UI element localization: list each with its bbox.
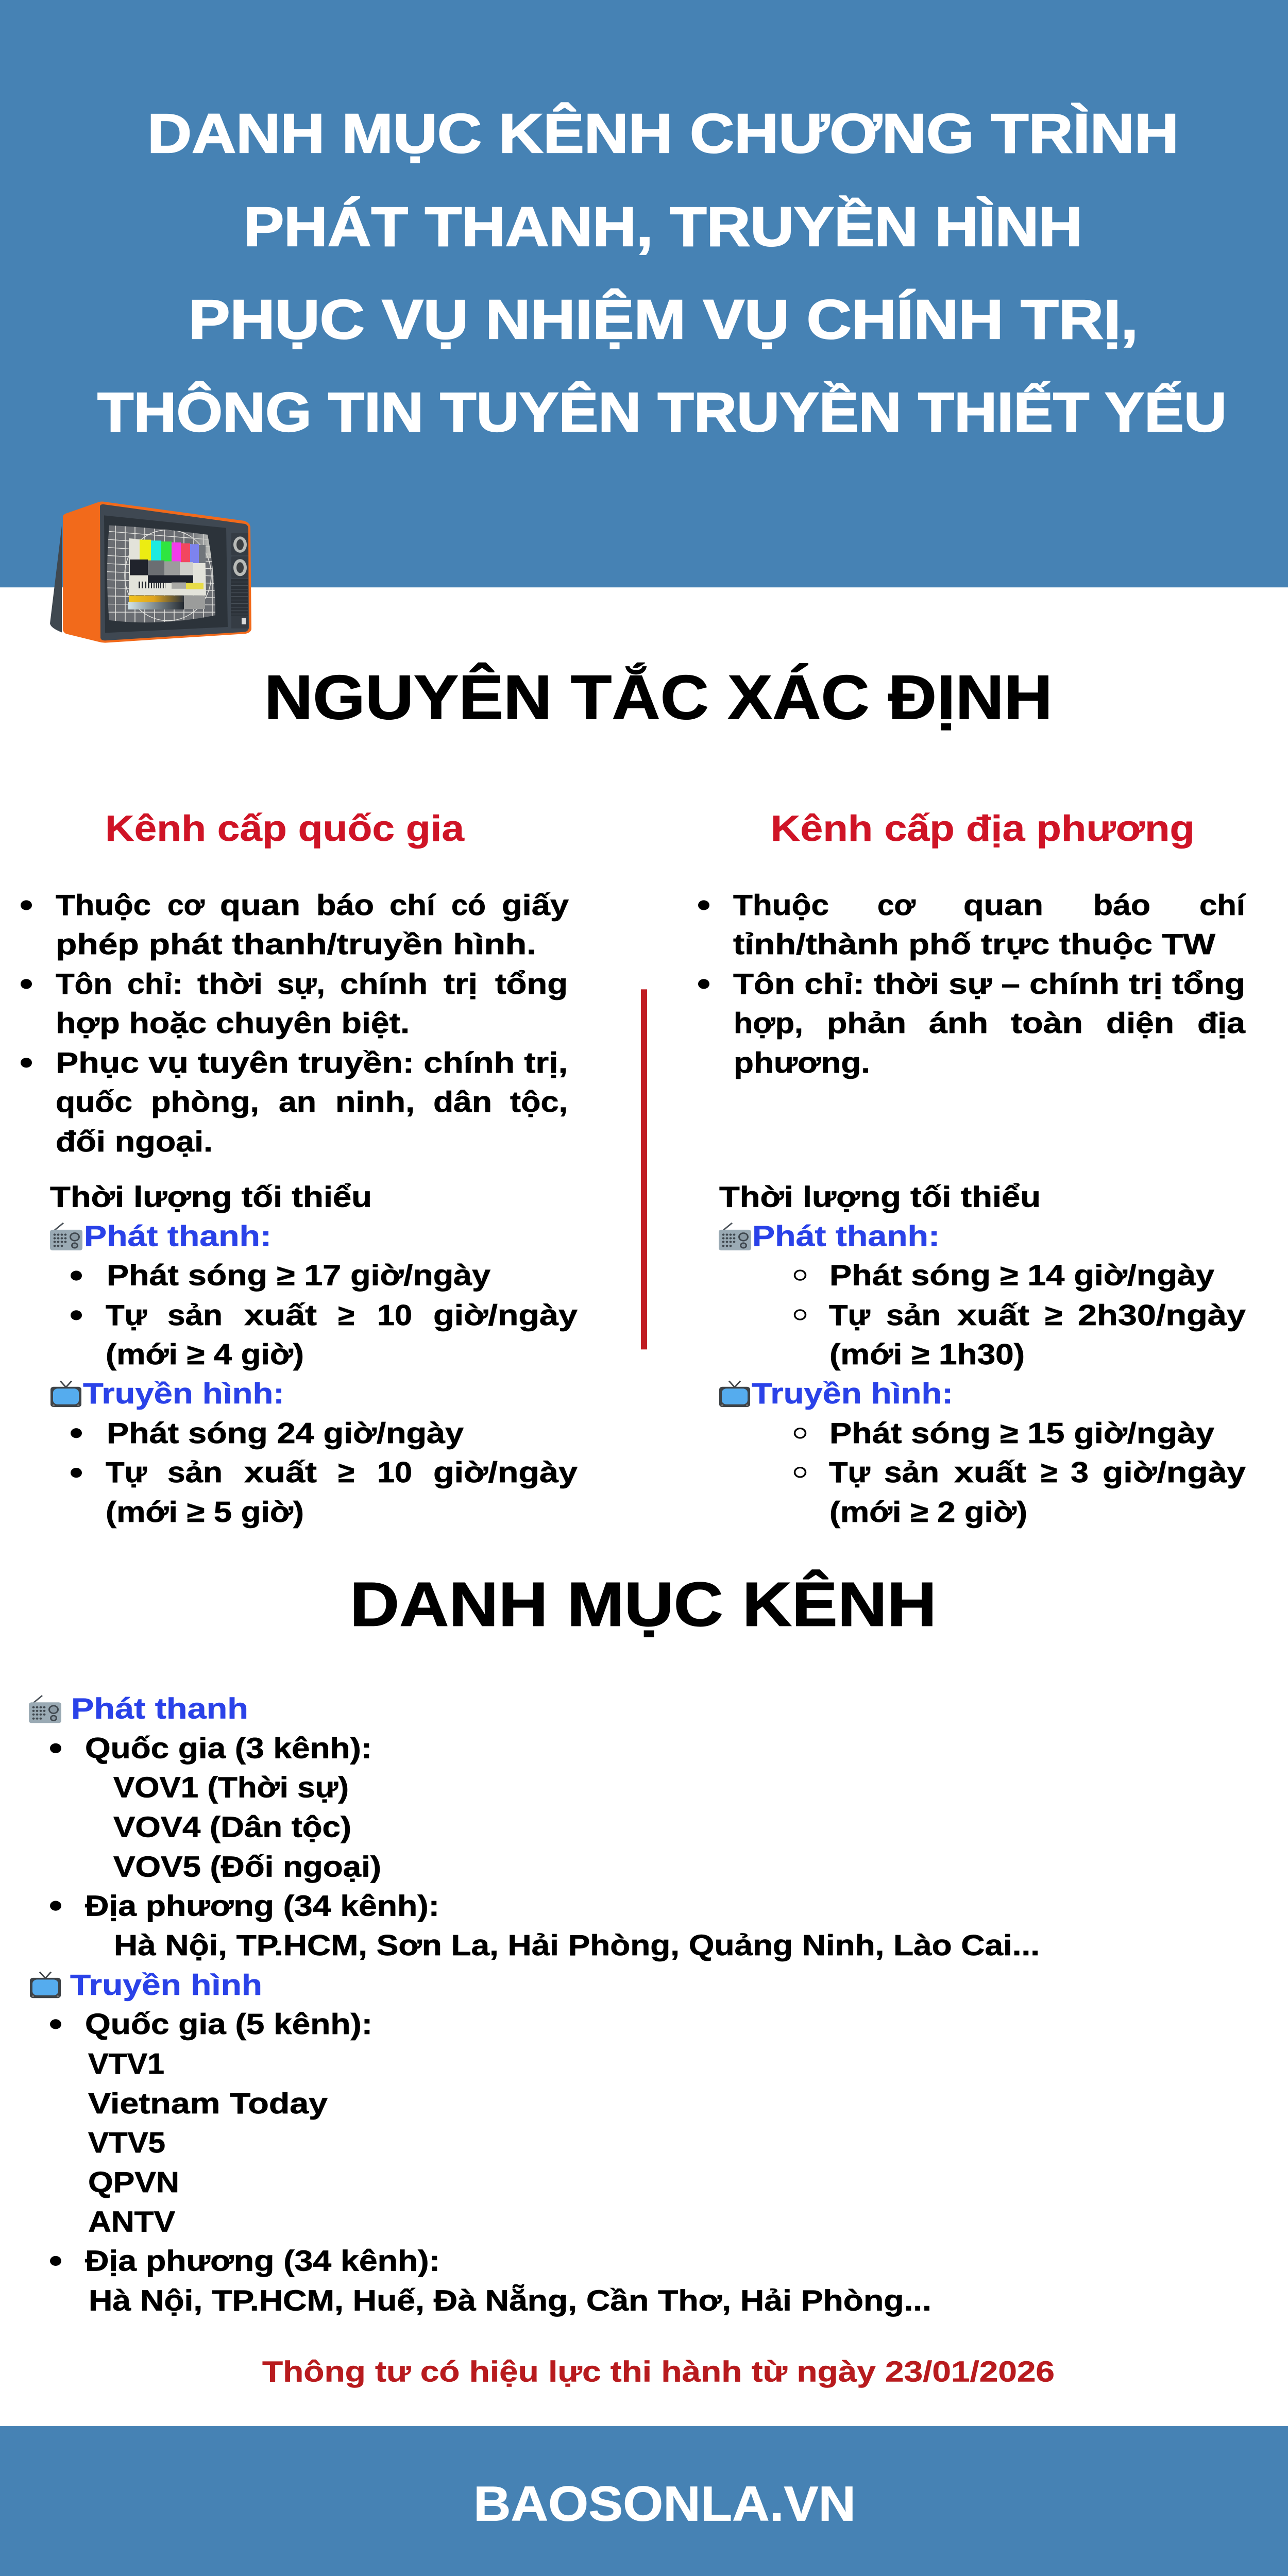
subheading: national: Kênh cấp quốc gia	[105, 808, 465, 849]
minimum airtime: local	[719, 1180, 1246, 1528]
minimum airtime: national: giờ/ngày	[433, 1456, 578, 1488]
criteria list: national: đối ngoại.	[56, 1125, 213, 1158]
footer band	[0, 2426, 1288, 2576]
title	[97, 103, 1227, 443]
panel: radio channel list: VOV1 (Thời sự)	[113, 1771, 349, 1804]
criteria list: local: địa	[1197, 1007, 1246, 1039]
minimum airtime: local: Phát sóng ≥ 15 giờ/ngày	[829, 1417, 1214, 1449]
panel: television channel list: VTV5	[88, 2126, 165, 2159]
minimum airtime: national: 10	[377, 1299, 412, 1331]
minimum airtime: national: (mới ≥ 5 giờ)	[106, 1496, 304, 1528]
criteria list: local: diện	[1106, 1007, 1174, 1039]
criteria list: national: chí	[389, 889, 436, 921]
panel: local channels	[698, 808, 1246, 1528]
panel: radio channel list: Hà Nội, TP.HCM, Sơn La, Hải Phòng, Quảng Ninh, Lào Cai...	[114, 1929, 1040, 1961]
criteria list: national: có	[451, 889, 486, 921]
minimum airtime: local: Tự	[829, 1456, 871, 1488]
minimum airtime: national: Phát thanh:	[84, 1219, 272, 1252]
criteria list: national: tộc,	[510, 1086, 568, 1118]
criteria list: national: ninh,	[335, 1086, 415, 1118]
panel: television channel list: QPVN	[88, 2166, 179, 2198]
minimum airtime: national: Thời lượng tối thiểu	[50, 1180, 372, 1213]
minimum airtime: national: sản	[167, 1456, 223, 1488]
minimum airtime: local: (mới ≥ 2 giờ)	[829, 1496, 1027, 1528]
panel: television channel list: ANTV	[88, 2205, 175, 2238]
panel: television channel list: Quốc gia (5 kênh):	[85, 2008, 372, 2040]
criteria list: local: toàn	[1011, 1007, 1083, 1039]
criteria list: national: Thuộc	[56, 889, 151, 921]
criteria list: local	[698, 889, 1246, 1079]
icon: retro orange television	[50, 501, 251, 643]
minimum airtime: local: Tự	[829, 1299, 871, 1331]
minimum airtime: national: Tự	[106, 1456, 147, 1488]
title: THÔNG TIN TUYÊN TRUYỀN THIẾT YẾU	[97, 381, 1227, 443]
criteria list: local: hợp,	[734, 1007, 803, 1039]
criteria list: local: quan	[963, 889, 1043, 921]
panel: national channels	[21, 808, 578, 1528]
title: DANH MỤC KÊNH CHƯƠNG TRÌNH	[147, 103, 1179, 164]
minimum airtime: local: giờ/ngày	[1103, 1456, 1246, 1488]
subheading: local: Kênh cấp địa phương	[771, 808, 1195, 849]
criteria list: local: ánh	[929, 1007, 988, 1039]
criteria list: national	[21, 889, 569, 1158]
minimum airtime: national: ≥	[338, 1299, 354, 1331]
criteria list: national: quan	[220, 889, 300, 921]
minimum airtime: national: xuất	[244, 1299, 317, 1331]
criteria list: national: chỉ:	[127, 968, 183, 1000]
minimum airtime: national: xuất	[244, 1456, 317, 1488]
minimum airtime: local: sản	[884, 1456, 939, 1488]
criteria list: local: báo	[1093, 889, 1150, 921]
minimum airtime: national: Phát sóng ≥ 17 giờ/ngày	[107, 1259, 490, 1291]
title: PHỤC VỤ NHIỆM VỤ CHÍNH TRỊ,	[189, 289, 1138, 350]
minimum airtime: local: Phát sóng ≥ 14 giờ/ngày	[829, 1259, 1214, 1291]
minimum airtime: national: Tự	[106, 1299, 147, 1331]
criteria list: national: báo	[316, 889, 374, 921]
minimum airtime: national: giờ/ngày	[433, 1299, 578, 1331]
criteria list: national: an	[279, 1086, 316, 1118]
minimum airtime: local: ≥	[1045, 1299, 1062, 1331]
criteria list: national: quốc	[56, 1086, 132, 1118]
panel: television channel list: Hà Nội, TP.HCM, Huế, Đà Nẵng, Cần Thơ, Hải Phòng...	[89, 2284, 931, 2317]
criteria list: national: tổng	[495, 968, 568, 1000]
criteria list: local: Thuộc	[733, 889, 829, 921]
red divider	[641, 989, 647, 1349]
criteria list: national: Tôn	[56, 968, 112, 1000]
heading: channel list: DANH MỤC KÊNH	[350, 1569, 937, 1639]
minimum airtime: local: ≥	[1041, 1456, 1057, 1488]
minimum airtime: local: xuất	[957, 1299, 1029, 1331]
panel: television channel list: Địa phương (34 kênh):	[85, 2244, 440, 2277]
criteria list: local: phương.	[734, 1046, 870, 1079]
criteria list: national: chính	[340, 968, 428, 1000]
minimum airtime: local: 2h30/ngày	[1078, 1299, 1246, 1331]
criteria list: national: dân	[433, 1086, 492, 1118]
criteria list: national: phòng,	[151, 1086, 259, 1118]
minimum airtime: local: sản	[886, 1299, 941, 1331]
criteria list: local: phản	[827, 1007, 906, 1039]
panel: radio channel list: VOV5 (Đối ngoại)	[113, 1850, 381, 1883]
criteria list: local: tỉnh/thành phố trực thuộc TW	[733, 928, 1215, 960]
minimum airtime: local: 3	[1071, 1456, 1089, 1488]
criteria list: local: Tôn chỉ: thời sự – chính trị tổng	[733, 968, 1245, 1000]
footer band: BAOSONLA.VN	[473, 2476, 856, 2531]
minimum airtime: local: xuất	[954, 1456, 1026, 1488]
panel: television channel list	[30, 1969, 931, 2317]
criteria list: local: chí	[1199, 889, 1246, 921]
minimum airtime: local: Thời lượng tối thiểu	[719, 1180, 1041, 1213]
minimum airtime: local: Phát thanh:	[752, 1219, 940, 1252]
panel: radio channel list: Phát thanh	[71, 1692, 248, 1725]
criteria list: national: sự,	[277, 968, 325, 1000]
panel: radio channel list: Địa phương (34 kênh):	[85, 1889, 439, 1922]
panel: radio channel list	[29, 1692, 1040, 1961]
minimum airtime: local: Truyền hình:	[752, 1377, 953, 1410]
criteria list: national: trị	[444, 968, 478, 1000]
minimum airtime: national	[50, 1180, 578, 1528]
minimum airtime: national: sản	[167, 1299, 223, 1331]
criteria list: national: thời	[197, 968, 263, 1000]
minimum airtime: national: 10	[377, 1456, 412, 1488]
minimum airtime: national: Truyền hình:	[83, 1377, 284, 1410]
title: PHÁT THANH, TRUYỀN HÌNH	[244, 196, 1082, 258]
minimum airtime: national: Phát sóng 24 giờ/ngày	[107, 1417, 464, 1449]
panel: television channel list: Truyền hình	[70, 1969, 262, 2001]
panel: television channel list: VTV1	[88, 2047, 164, 2080]
header band	[0, 0, 1288, 587]
panel: radio channel list: VOV4 (Dân tộc)	[113, 1810, 351, 1843]
criteria list: local: cơ	[877, 889, 916, 921]
criteria list: national: Phục vụ tuyên truyền: chính trị,	[56, 1046, 568, 1079]
minimum airtime: national: (mới ≥ 4 giờ)	[106, 1338, 304, 1370]
minimum airtime: national: ≥	[338, 1456, 354, 1488]
heading: principles: NGUYÊN TẮC XÁC ĐỊNH	[264, 662, 1053, 732]
panel: radio channel list: Quốc gia (3 kênh):	[85, 1732, 372, 1765]
minimum airtime: local: (mới ≥ 1h30)	[829, 1338, 1025, 1370]
notice: effective date: Thông tư có hiệu lực thi hành từ ngày 23/01/2026	[262, 2355, 1055, 2388]
panel: television channel list: Vietnam Today	[88, 2087, 328, 2120]
criteria list: national: phép phát thanh/truyền hình.	[56, 928, 536, 960]
criteria list: national: hợp hoặc chuyên biệt.	[56, 1007, 410, 1039]
criteria list: national: giấy	[502, 889, 569, 921]
criteria list: national: cơ	[167, 889, 205, 921]
